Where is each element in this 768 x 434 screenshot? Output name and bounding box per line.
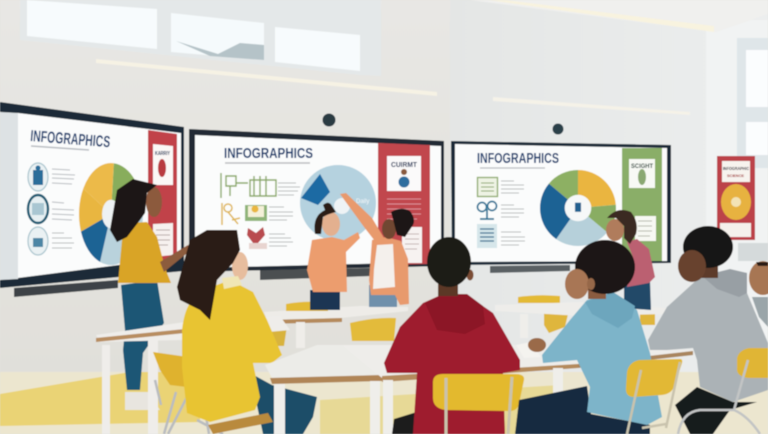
floor — [0, 372, 768, 434]
pants — [515, 386, 650, 434]
hair — [427, 237, 471, 287]
ceiling light upper left — [96, 59, 437, 96]
back table right — [495, 302, 668, 338]
icon circle 1 — [28, 163, 48, 191]
title: INFOGRAPHICS — [30, 128, 111, 151]
blue hoodie boy chair — [626, 359, 682, 434]
chair back yellow — [286, 302, 328, 311]
pie chart — [300, 165, 376, 241]
icon tree — [478, 202, 496, 219]
chair back right — [518, 295, 560, 303]
shirt — [373, 244, 395, 289]
seated girl chair — [153, 352, 223, 434]
chair back 2 — [350, 318, 396, 341]
icon board — [478, 178, 498, 196]
card top: KARRIY — [155, 151, 171, 157]
screen 3 tray — [490, 265, 570, 273]
blazer — [182, 280, 282, 422]
face — [678, 250, 706, 282]
hand — [528, 338, 546, 352]
wall poster: INFOGRAPHIC — [723, 166, 750, 171]
hair — [177, 230, 240, 320]
card bottom — [402, 227, 422, 263]
teacher — [110, 179, 191, 410]
boy in red hoodie — [384, 237, 520, 434]
ear — [587, 278, 595, 290]
face — [146, 187, 162, 217]
pie chart: Daily — [356, 199, 369, 205]
subtitle — [31, 146, 89, 150]
body — [307, 232, 360, 292]
neck — [588, 285, 606, 299]
hair — [391, 209, 414, 237]
chair back right 2 — [544, 310, 569, 333]
screen 1 — [0, 102, 184, 288]
left front table — [96, 316, 290, 434]
chair back 3 — [270, 326, 287, 346]
jeans — [250, 373, 317, 434]
cardigan child — [340, 193, 414, 307]
title: INFOGRAPHICS — [224, 145, 313, 162]
icon circle 2 — [28, 195, 48, 223]
screen 2 tray — [260, 268, 372, 280]
grey hoodie boy chair — [678, 348, 768, 434]
centre front table — [265, 345, 382, 434]
ceiling light right — [493, 97, 690, 115]
neck — [438, 282, 458, 296]
shoe — [125, 392, 160, 410]
right front table — [342, 342, 693, 434]
face — [382, 219, 396, 239]
hair — [110, 179, 157, 242]
pie chart — [540, 170, 616, 246]
hood — [585, 292, 635, 328]
collar — [222, 276, 242, 289]
screen 3 — [451, 141, 671, 265]
card top — [387, 156, 421, 191]
subtitle — [225, 162, 310, 164]
card bottom — [635, 216, 656, 241]
hoodie — [542, 293, 662, 425]
neck — [700, 262, 718, 278]
ceiling light top — [488, 0, 714, 32]
cardigan — [369, 237, 409, 305]
text lines — [269, 183, 300, 246]
icon list — [477, 224, 497, 248]
icon book — [245, 205, 267, 221]
wall left — [0, 0, 450, 400]
top — [627, 239, 655, 287]
boy in blue hoodie — [515, 240, 662, 434]
face — [232, 252, 248, 280]
boy in grey hoodie — [648, 226, 768, 434]
diagram icon green — [221, 173, 276, 198]
hood — [702, 269, 747, 297]
wall right — [450, 0, 768, 400]
camera right — [552, 124, 564, 134]
right window — [737, 38, 768, 168]
red side panel — [148, 130, 177, 262]
ear — [466, 270, 474, 280]
card top — [629, 159, 655, 188]
icon yellow — [222, 203, 240, 225]
jeans — [121, 280, 164, 390]
face — [606, 219, 624, 241]
pants — [675, 387, 757, 434]
text lines — [501, 181, 525, 245]
chair back right 3 — [640, 311, 655, 325]
side wall — [706, 20, 768, 400]
hair — [575, 240, 635, 294]
face — [322, 212, 340, 236]
hoodie — [648, 270, 768, 402]
wall poster: SCIENCE — [727, 173, 744, 178]
camera left — [322, 114, 336, 126]
arm — [160, 245, 191, 272]
hood — [425, 294, 485, 334]
upper windows — [20, 0, 381, 76]
child at right edge — [749, 261, 768, 327]
wall poster — [717, 156, 755, 240]
subtitle — [480, 167, 545, 169]
face — [565, 269, 589, 299]
pie chart — [79, 163, 143, 265]
shelf by window — [738, 243, 768, 261]
hair — [314, 203, 336, 234]
raised arm — [340, 193, 384, 245]
pants — [392, 411, 420, 434]
title: INFOGRAPHICS — [477, 151, 559, 167]
pants — [310, 290, 340, 310]
jeans — [369, 285, 397, 307]
red panel text — [387, 199, 421, 219]
card bottom — [153, 223, 173, 257]
icon red — [247, 227, 267, 249]
shirt — [118, 222, 171, 283]
seat — [208, 413, 273, 434]
text lines — [52, 169, 75, 248]
hoodie — [384, 294, 520, 434]
back table left — [264, 306, 408, 348]
pink top child — [606, 210, 655, 310]
orange shirt child — [307, 203, 360, 310]
card top: CUIRMT — [391, 162, 418, 169]
screen 2 — [189, 129, 444, 272]
green side panel — [622, 148, 662, 261]
red hoodie boy chair — [433, 374, 524, 434]
hair — [607, 210, 637, 244]
screen 1 tray — [14, 280, 118, 297]
jeans — [624, 281, 651, 310]
ceiling — [470, 0, 768, 32]
card top — [153, 144, 173, 185]
icon circle 3 — [28, 227, 48, 255]
red side panel — [378, 143, 430, 265]
hair — [683, 226, 733, 268]
seated girl — [177, 230, 317, 434]
card top: SCIGHT — [631, 164, 653, 170]
